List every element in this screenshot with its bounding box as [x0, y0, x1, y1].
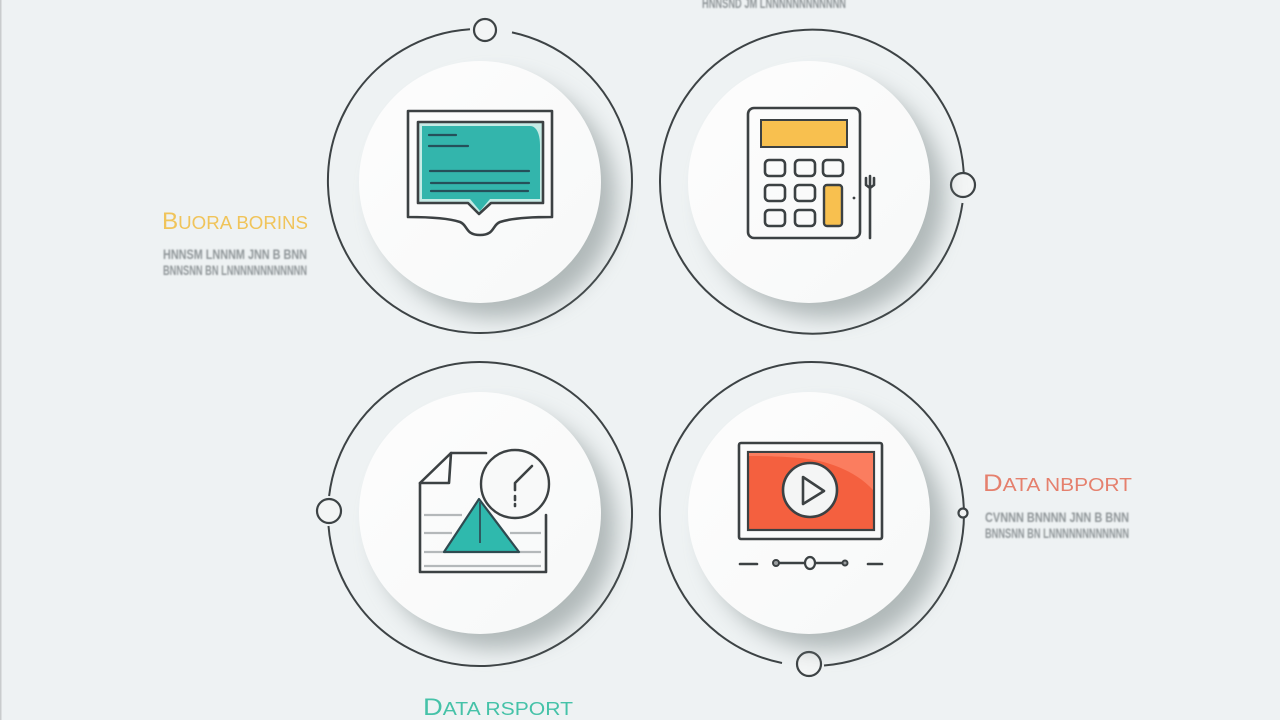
text block: left label: BUORA BORINS: [162, 208, 308, 235]
panel: top right calculator card: [660, 30, 975, 334]
text block: right label: BNNSNN BN LNNNNNNNNNNNN: [985, 525, 1129, 541]
icon: calculator: [748, 108, 874, 238]
outer ring with nodes: [660, 362, 968, 676]
text block: right label: [983, 470, 1132, 541]
raised disc with shadow: [688, 392, 945, 649]
text block: left label: BNNSNN BN LNNNNNNNNNNNN: [163, 262, 307, 278]
icon: document with triangle and clock: [420, 450, 549, 572]
panel: top left document card: [328, 19, 632, 333]
icon: document screen: [408, 111, 552, 235]
text block: left label: HNNSM LNNNM JNN B BNN: [163, 246, 307, 262]
outer ring with node: [660, 30, 975, 334]
raised disc with shadow: [688, 61, 945, 318]
panel: bottom right video card: [660, 362, 968, 676]
outer ring with node: [317, 362, 632, 666]
panel: bottom left report card: [317, 362, 632, 666]
outer ring with node: [328, 19, 632, 333]
raised disc with shadow: [359, 61, 616, 318]
icon: video player: [739, 443, 882, 569]
text block: right label: CVNNN BNNNN JNN B BNN: [985, 509, 1129, 525]
text block: right label: DATA NBPORT: [983, 470, 1132, 497]
raised disc with shadow: [359, 392, 616, 649]
text block: left label: [162, 208, 308, 278]
